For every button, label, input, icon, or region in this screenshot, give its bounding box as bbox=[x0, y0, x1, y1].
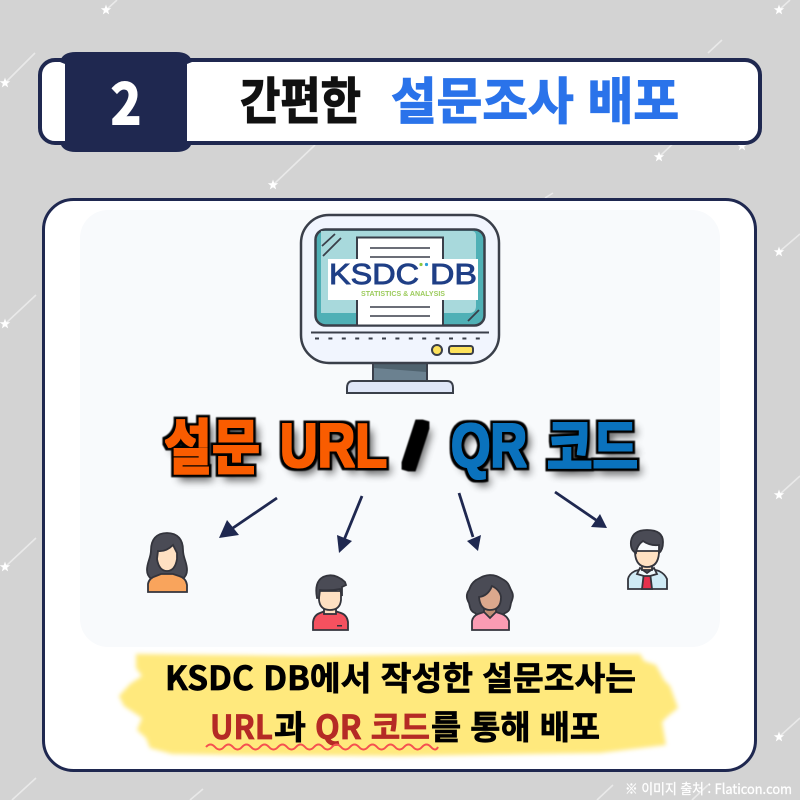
main panel bbox=[44, 200, 756, 770]
step number badge: 2 bbox=[111, 60, 141, 141]
KSDC DB logo: DB bbox=[430, 259, 477, 291]
heading: survey URL / QR code: QR bbox=[451, 412, 527, 481]
monitor screen bbox=[316, 230, 484, 326]
KSDC DB logo bbox=[328, 259, 478, 300]
arrow 4 bbox=[555, 492, 607, 528]
callout: yellow brush highlight with text bbox=[119, 652, 678, 756]
header title: 설문조사 배포 bbox=[391, 62, 679, 134]
icon: man in red shirt bbox=[313, 575, 348, 630]
monitor controls bbox=[311, 332, 489, 355]
icon: woman with long dark hair bbox=[147, 533, 187, 592]
header title: 간편한 bbox=[240, 62, 361, 134]
monitor body bbox=[301, 215, 499, 363]
heading: survey URL / QR code: 코드 bbox=[547, 400, 638, 487]
arrows to respondents bbox=[219, 492, 607, 553]
callout line 1: KSDC DB에서 작성한 설문조사는 bbox=[165, 652, 636, 700]
callout line 2 bbox=[210, 701, 600, 749]
monitor stand bbox=[347, 362, 453, 393]
icon: computer monitor with KSDC DB logo bbox=[301, 215, 499, 393]
callout line 2: 과 bbox=[274, 701, 306, 749]
callout line 2: URL bbox=[210, 701, 273, 749]
KSDC DB logo: STATISTICS & ANALYSIS bbox=[361, 291, 445, 298]
heading: survey URL / QR code bbox=[164, 400, 638, 487]
arrow 2 bbox=[337, 496, 362, 553]
step number badge bbox=[60, 52, 192, 152]
yellow brush stroke bbox=[119, 654, 678, 756]
icon: man in shirt and red tie bbox=[628, 530, 667, 589]
heading: survey URL / QR code: URL bbox=[280, 412, 387, 481]
light inner panel bbox=[80, 210, 720, 647]
document on screen bbox=[357, 238, 443, 326]
arrow 3 bbox=[459, 493, 481, 551]
KSDC DB logo: KSDC bbox=[329, 259, 419, 291]
header bar bbox=[40, 60, 760, 143]
callout line 2: 를 통해 배포 bbox=[431, 701, 600, 749]
header banner bbox=[40, 52, 760, 152]
icon: woman with curly hair bbox=[467, 575, 513, 630]
heading: survey URL / QR code: 설문 bbox=[164, 400, 260, 487]
arrow 1 bbox=[219, 498, 277, 538]
wavy underline bbox=[206, 744, 438, 750]
header title bbox=[240, 62, 679, 134]
callout line 2: QR 코드 bbox=[315, 701, 430, 749]
